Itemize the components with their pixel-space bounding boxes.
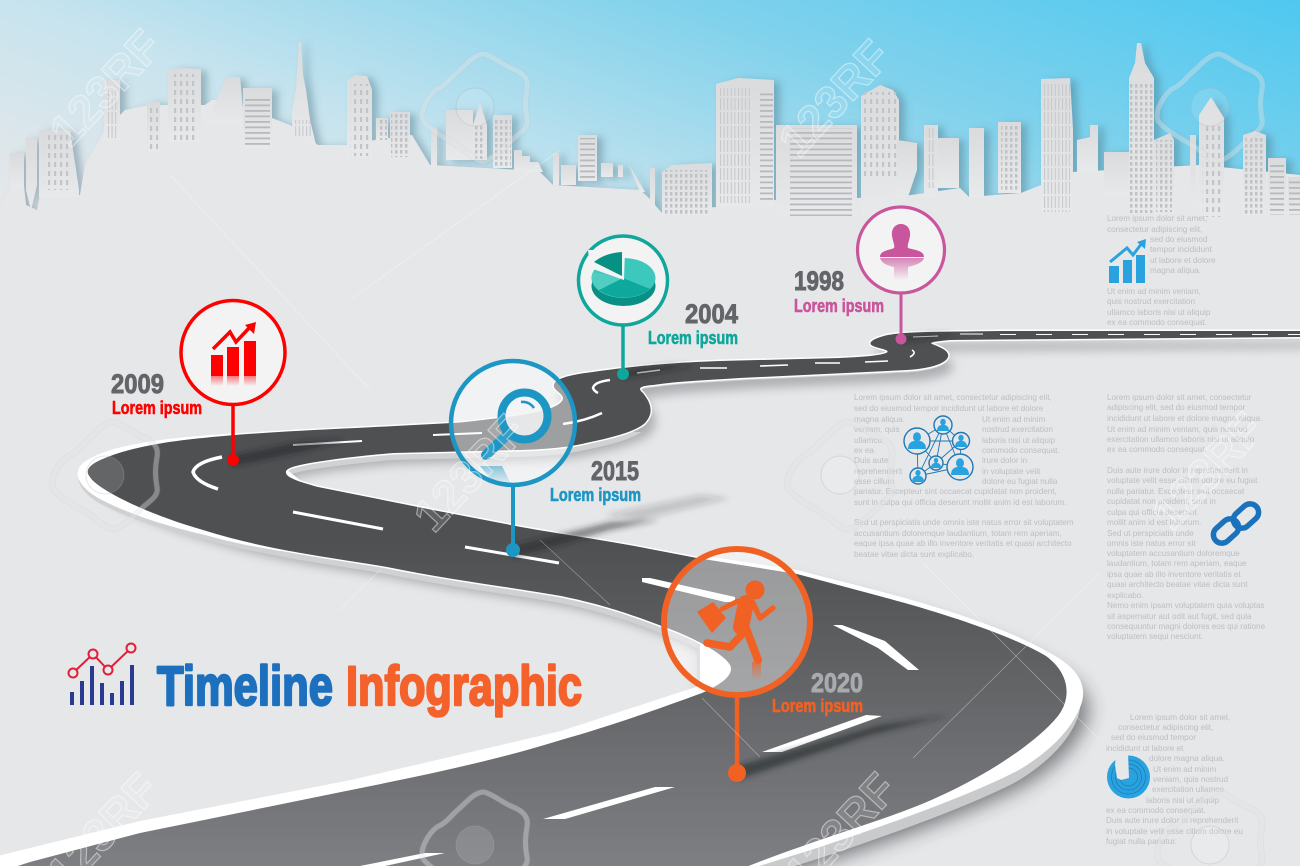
text block: middle column: eaque ipsa quae ab illo inventore veritatis et quasi architecto: [854, 539, 1072, 548]
label: 1998: Lorem ipsum: [794, 296, 884, 316]
icon: 3D pie chart: [588, 250, 656, 306]
text block: bottom right: fugiat nulla pariatur.: [1106, 837, 1177, 846]
text block: bottom right: [1106, 713, 1243, 846]
icon: red growth chart: [211, 322, 256, 386]
text block: top right: sed do eiusmod: [1150, 235, 1207, 244]
icon: person: [880, 224, 924, 280]
text block: top right: magna aliqua.: [1150, 266, 1201, 275]
text block: right column: voluptatem sequi nesciunt.: [1107, 632, 1203, 641]
text block: top right: Lorem ipsum dolor sit amet,: [1107, 214, 1207, 223]
text block: bottom right: incididunt ut labore et: [1106, 744, 1184, 753]
text block: bottom right: consectetur adipiscing elit,: [1118, 723, 1213, 732]
text block: middle column: Lorem ipsum dolor sit amet, consectetur adipiscing elit,: [854, 393, 1052, 402]
label: 2020: [772, 668, 863, 716]
text block: right column: [1107, 393, 1266, 641]
label: 2004: Lorem ipsum: [648, 328, 738, 348]
text block: bottom right: Duis aute irure dolor in reprehenderit: [1106, 816, 1239, 825]
label: 2009: Lorem ipsum: [112, 398, 202, 418]
text block: middle column: in voluptate velit: [982, 467, 1041, 476]
stock watermarks: 123RF: [1141, 403, 1273, 539]
text block: bottom right: Ut enim ad minim: [1153, 765, 1216, 774]
sky gradient: [0, 0, 1300, 240]
icon: people network: [904, 416, 973, 484]
label: 2009: [111, 369, 202, 418]
text block: middle column: laboris nisi ut aliquip: [982, 436, 1056, 445]
label: 2015: [550, 456, 641, 505]
text block: middle column: commodo consequat.: [982, 446, 1060, 455]
title: [157, 654, 582, 717]
text block: right column: nulla pariatur. Excepteur sint occaecat: [1107, 487, 1245, 496]
label: 2020: Lorem ipsum: [772, 696, 863, 716]
stock watermarks: 123RF: [39, 20, 171, 156]
text block: middle column: esse cillum: [854, 477, 894, 486]
text block: top right: ut labore et dolore: [1150, 256, 1216, 265]
pin: 1998: [858, 207, 944, 344]
text block: middle column: sunt in culpa qui officia deserunt mollit anim id est laborum.: [854, 498, 1067, 507]
label: 2020: 2020: [811, 668, 863, 698]
text block: middle column: ex ea: [854, 446, 874, 455]
label: 2015: Lorem ipsum: [550, 485, 641, 505]
text block: bottom right: laboris nisi ut aliquip: [1146, 796, 1220, 805]
icon: running businessman: [698, 580, 773, 680]
text block: bottom right: in voluptate velit esse cillum dolore eu: [1106, 827, 1243, 836]
label: 2015: 2015: [591, 456, 639, 486]
text block: middle column: dolore eu fugiat nulla: [982, 477, 1058, 486]
text block: right column: culpa qui officia deserunt: [1107, 508, 1197, 517]
text block: bottom right: sed do eiusmod tempor: [1111, 733, 1196, 742]
text block: middle column: Ut enim ad minim: [982, 415, 1045, 424]
title: Timeline: [157, 654, 333, 717]
text block: right column: Sed ut perspiciatis unde: [1107, 529, 1194, 538]
text block: middle column: nostrud exercitation: [982, 425, 1053, 434]
title icon: chart with line: [68, 644, 136, 705]
text block: middle column: pariatur. Excepteur sint occaecat cupidatat non proident,: [854, 487, 1057, 496]
text block: middle column: [854, 393, 1074, 559]
text block: middle column: beatae vitae dicta sunt explicabo.: [854, 550, 974, 559]
text block: top right: quis nostrud exercitation: [1107, 297, 1195, 306]
pin shadows: [233, 334, 955, 780]
text block: bottom right: veniam, quis nostrud: [1153, 775, 1228, 784]
text block: right column: ex ea commodo consequat.: [1107, 445, 1207, 454]
text block: right column: omnis iste natus error sit: [1107, 539, 1196, 548]
road: [0, 331, 1300, 866]
text block: right column: sit aspernatur aut odit aut fugit, sed quia: [1107, 612, 1252, 621]
label: 1998: [794, 266, 884, 316]
text block: middle column: accusantium doloremque laudantium, totam rem aperiam,: [854, 529, 1062, 538]
label: 1998: 1998: [794, 266, 844, 296]
text block: bottom right: ex ea commodo consequat.: [1106, 806, 1206, 815]
text block: middle column: irure dolor in: [982, 456, 1027, 465]
text block: right column: voluptate velit esse cillum dolore eu fugiat: [1107, 476, 1258, 485]
text block: middle column: ullamco: [854, 436, 882, 445]
text block: right column: incididunt ut labore et dolore magna aliqua.: [1107, 414, 1262, 423]
text block: top right: [1107, 214, 1216, 327]
text block: middle column: Duis aute: [854, 456, 889, 465]
text block: right column: consequuntur magni dolores eos qui ratione: [1107, 622, 1266, 631]
label: 2004: [648, 299, 738, 348]
pin: 2015: [451, 361, 575, 557]
text block: right column: Ut enim ad minim veniam, quis nostrud: [1107, 425, 1247, 434]
text block: middle column: reprehenderit: [854, 467, 903, 476]
text block: top right: consectetur adipiscing elit,: [1107, 225, 1202, 234]
label: 2004: 2004: [685, 299, 738, 329]
text block: right column: quasi architecto beatae vitae dicta sunt: [1107, 580, 1248, 589]
stock watermarks: 123RF: [768, 30, 900, 166]
text block: right column: exercitation ullamco laboris nisi ut aliquip: [1107, 435, 1255, 444]
text block: right column: laudantium, totam rem aperiam, eaque: [1107, 559, 1247, 568]
text block: top right: tempor incididunt: [1150, 245, 1213, 254]
text block: top right: ex ea commodo consequat.: [1107, 318, 1207, 327]
text block: right column: cupidatat non proident, sunt in: [1107, 497, 1216, 506]
icon: blue growth chart: [1109, 239, 1146, 283]
text block: right column: mollit anim id est laborum.: [1107, 518, 1201, 527]
pin: 2020: [664, 549, 810, 782]
text block: bottom right: Lorem ipsum dolor sit amet,: [1130, 713, 1230, 722]
road lane markings: [193, 334, 1300, 866]
label: 2009: 2009: [111, 369, 164, 399]
text block: right column: Duis aute irure dolor in reprehenderit in: [1107, 466, 1248, 475]
text block: right column: explicabo.: [1107, 591, 1144, 600]
pin: 2009: [181, 300, 285, 466]
text block: top right: Ut enim ad minim veniam,: [1107, 287, 1201, 296]
text block: right column: adipiscing elit, sed do eiusmod tempor: [1107, 403, 1245, 412]
text block: top right: ullamco laboris nisi ut aliquip: [1107, 308, 1211, 317]
text block: middle column: Sed ut perspiciatis unde omnis iste natus error sit voluptatem: [854, 518, 1074, 527]
text block: middle column: veniam, quis: [854, 425, 900, 434]
text block: bottom right: dolore magna aliqua.: [1149, 754, 1225, 763]
title: Infographic: [346, 654, 582, 717]
icon: magnifier: [480, 392, 548, 486]
text block: right column: Nemo enim ipsam voluptatem quia voluptas: [1107, 601, 1265, 610]
city skyline: [0, 42, 1300, 265]
text block: middle column: sed do eiusmod tempor incididunt ut labore et dolore: [854, 404, 1044, 413]
text block: bottom right: exercitation ullamco: [1152, 785, 1224, 794]
stock watermarks: 123RF: [403, 405, 535, 541]
text block: right column: Lorem ipsum dolor sit amet, consectetur: [1107, 393, 1252, 402]
icon: chain link: [1210, 500, 1262, 547]
icon: radial donut: [1107, 752, 1150, 798]
text block: right column: ipsa quae ab illo inventore veritatis et: [1107, 570, 1241, 579]
text block: middle column: magna aliqua.: [854, 415, 905, 424]
text block: right column: voluptatem accusantium doloremque: [1107, 549, 1240, 558]
pin: 2004: [578, 236, 668, 380]
